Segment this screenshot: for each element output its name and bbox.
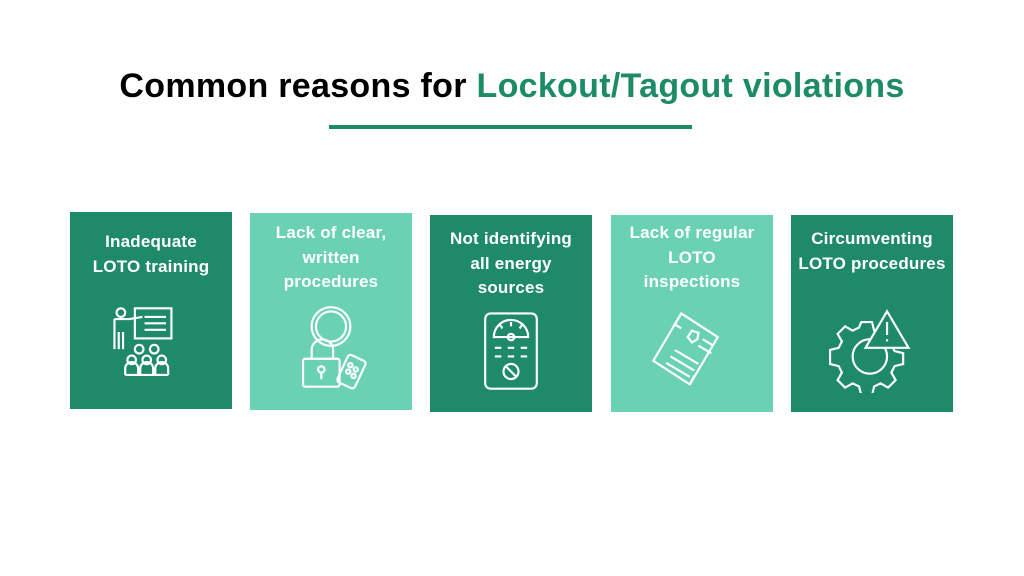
card: inadequate training [70, 212, 232, 409]
text: energy sources [450, 229, 572, 297]
text: circumventing [798, 229, 946, 272]
text: written procedures: Lack of clear, [276, 223, 386, 242]
text: inadequate training: Inadequate [105, 232, 197, 251]
icon: presenter [113, 307, 172, 376]
text: inspections: Lack of regular [630, 223, 754, 242]
text: circumventing: LOTO procedures [798, 254, 946, 272]
card: circumventing [791, 215, 953, 412]
text: circumventing: Circumventing [811, 229, 933, 248]
card: energy sources [430, 215, 592, 412]
text: written procedures [276, 223, 386, 291]
card: inspections [611, 215, 773, 412]
icon: padlock keys [302, 306, 367, 390]
text: energy sources: all energy [470, 254, 552, 272]
card: written procedures [250, 213, 412, 410]
icon: document [652, 312, 720, 386]
text: energy sources: sources [478, 278, 544, 297]
text: written procedures: procedures [284, 272, 378, 291]
text: inspections [630, 223, 754, 291]
icon: meter [484, 312, 538, 390]
text: written procedures: written [302, 248, 360, 266]
icon: gear warning [829, 309, 910, 393]
text: inadequate training [93, 232, 209, 276]
text: inspections: LOTO [668, 248, 716, 266]
text: inspections: inspections [644, 272, 740, 291]
title: Common reasons for Lockout/Tagout violations [119, 67, 905, 105]
text: inadequate training: LOTO training [93, 256, 209, 276]
text: energy sources: Not identifying [450, 229, 572, 248]
